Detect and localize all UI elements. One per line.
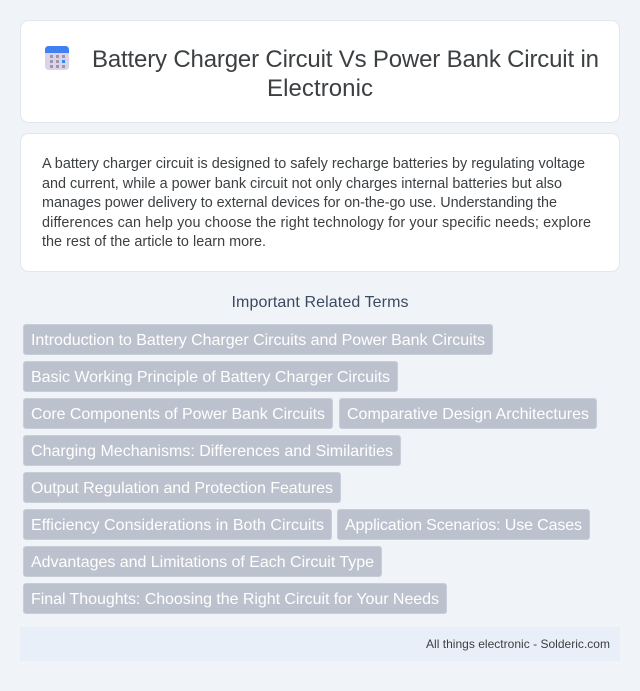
tag (338, 510, 590, 540)
title: Battery Charger Circuit Vs Power Bank Circuit in (92, 46, 599, 73)
heading: important related terms: Important Related Terms (232, 294, 408, 311)
tag (24, 398, 332, 428)
tag (340, 398, 596, 428)
tag: Core Components of Power Bank Circuits (31, 406, 325, 423)
tag (24, 324, 492, 354)
intro text: manages power delivery to external devices for on-the-go use. Understanding the (42, 195, 557, 211)
tag: Application Scenarios: Use Cases (345, 517, 582, 534)
tag: Comparative Design Architectures (347, 406, 589, 423)
tag (24, 546, 382, 576)
tag (24, 436, 400, 466)
title (92, 46, 599, 102)
tag: Final Thoughts: Choosing the Right Circuit for Your Needs (31, 591, 439, 608)
tag: Advantages and Limitations of Each Circuit Type (31, 554, 374, 571)
tag: Output Regulation and Protection Features (31, 480, 333, 497)
tag: Charging Mechanisms: Differences and Similarities (31, 443, 393, 460)
intro panel (20, 134, 620, 272)
intro text: A battery charger circuit is designed to safely recharge batteries by regulating voltage (42, 156, 585, 172)
icon: calendar (45, 46, 69, 70)
header panel (20, 20, 620, 122)
tag: Efficiency Considerations in Both Circuits (31, 517, 324, 534)
tag: Basic Working Principle of Battery Charger Circuits (31, 369, 390, 386)
footer credit: All things electronic - Solderic.com (426, 637, 610, 651)
tag (24, 362, 398, 392)
tag: Introduction to Battery Charger Circuits and Power Bank Circuits (31, 332, 485, 349)
intro text (42, 156, 591, 250)
tag (24, 472, 340, 502)
title: Electronic (267, 75, 373, 102)
tag (24, 584, 446, 614)
footer (20, 627, 620, 661)
intro text: differences can help you choose the right technology for your specific needs; explore (42, 215, 591, 231)
intro text: the rest of the article to learn more. (42, 234, 266, 250)
tag (24, 510, 332, 540)
tag list (24, 324, 596, 614)
intro text: and current, while a power bank circuit not only charges internal batteries but also (42, 176, 562, 192)
